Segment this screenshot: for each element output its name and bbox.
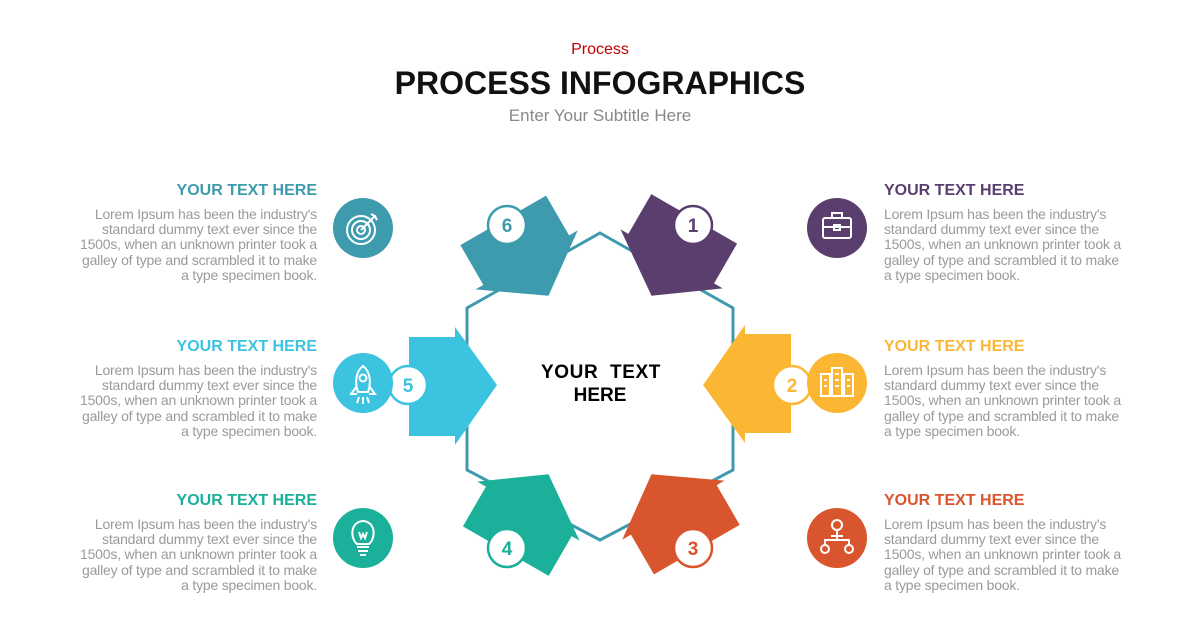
text block: left middle: galley of type and scrambled it to make xyxy=(82,408,317,424)
text block: right bottom: Lorem Ipsum has been the industry's xyxy=(884,516,1106,532)
text block: right middle: 1500s, when an unknown printer took a xyxy=(884,392,1121,408)
step 1 xyxy=(600,190,746,325)
text block: right middle: YOUR TEXT HERE xyxy=(884,338,1024,355)
text block: left middle: YOUR TEXT HERE xyxy=(177,338,317,355)
icon: rocket xyxy=(333,353,393,413)
text block: left bottom: standard dummy text ever since the xyxy=(102,531,317,547)
text block: right bottom: 1500s, when an unknown printer took a xyxy=(884,546,1121,562)
step 5 xyxy=(389,327,497,445)
text block: left bottom: 1500s, when an unknown printer took a xyxy=(80,546,317,562)
step 3: 3 xyxy=(688,539,698,560)
text block: left bottom: galley of type and scrambled it to make xyxy=(82,562,317,578)
text block: right top: standard dummy text ever since the xyxy=(884,221,1099,237)
center text xyxy=(541,362,661,406)
text block: left bottom xyxy=(80,492,318,593)
text block: right top xyxy=(884,182,1122,283)
step 4 xyxy=(454,445,600,580)
text block: right top: a type specimen book. xyxy=(884,267,1020,283)
text block: left top: 1500s, when an unknown printer took a xyxy=(80,236,317,252)
text block: right top: Lorem Ipsum has been the industry's xyxy=(884,206,1106,222)
text block: right middle xyxy=(884,338,1122,439)
text block: right top: galley of type and scrambled it to make xyxy=(884,252,1119,268)
text block: left bottom: Lorem Ipsum has been the industry's xyxy=(95,516,317,532)
step 4: 4 xyxy=(502,539,513,560)
subtitle: Enter Your Subtitle Here xyxy=(509,106,691,125)
text block: right bottom: standard dummy text ever since the xyxy=(884,531,1099,547)
hexagon outline xyxy=(467,233,733,540)
icon: buildings xyxy=(807,353,867,413)
icon: network xyxy=(807,508,867,568)
step 5: 5 xyxy=(403,376,414,397)
icon: target xyxy=(333,198,393,258)
text block: left middle: a type specimen book. xyxy=(181,423,317,439)
text block: left middle: 1500s, when an unknown printer took a xyxy=(80,392,317,408)
kicker: Process xyxy=(571,41,629,58)
text block: left bottom: YOUR TEXT HERE xyxy=(177,492,317,509)
center text: YOUR TEXT xyxy=(541,362,661,383)
text block: left top: galley of type and scrambled it to make xyxy=(82,252,317,268)
text block: left top xyxy=(80,182,318,283)
step 6: 6 xyxy=(502,216,512,237)
step 3 xyxy=(601,444,747,579)
text block: left middle: Lorem Ipsum has been the industry's xyxy=(95,362,317,378)
text block: right top: YOUR TEXT HERE xyxy=(884,182,1024,199)
text block: right top: 1500s, when an unknown printer took a xyxy=(884,236,1121,252)
text block: left middle: standard dummy text ever since the xyxy=(102,377,317,393)
center text: HERE xyxy=(574,385,626,406)
text block: left top: standard dummy text ever since the xyxy=(102,221,317,237)
text block: right middle: a type specimen book. xyxy=(884,423,1020,439)
step 1: 1 xyxy=(688,216,699,237)
icon: bulb xyxy=(333,508,393,568)
text block: left top: YOUR TEXT HERE xyxy=(177,182,317,199)
text block: right bottom: galley of type and scrambled it to make xyxy=(884,562,1119,578)
text block: left bottom: a type specimen book. xyxy=(181,577,317,593)
text block: right bottom: YOUR TEXT HERE xyxy=(884,492,1024,509)
text block: right bottom xyxy=(884,492,1122,593)
step 2 xyxy=(703,325,811,443)
text block: right bottom: a type specimen book. xyxy=(884,577,1020,593)
text block: right middle: galley of type and scrambled it to make xyxy=(884,408,1119,424)
text block: right middle: standard dummy text ever since the xyxy=(884,377,1099,393)
title: PROCESS INFOGRAPHICS xyxy=(395,65,805,101)
step 6 xyxy=(453,191,599,326)
text block: left middle xyxy=(80,338,318,439)
text block: right middle: Lorem Ipsum has been the industry's xyxy=(884,362,1106,378)
text block: left top: a type specimen book. xyxy=(181,267,317,283)
icon: briefcase xyxy=(807,198,867,258)
text block: left top: Lorem Ipsum has been the industry's xyxy=(95,206,317,222)
step 2: 2 xyxy=(787,376,797,397)
